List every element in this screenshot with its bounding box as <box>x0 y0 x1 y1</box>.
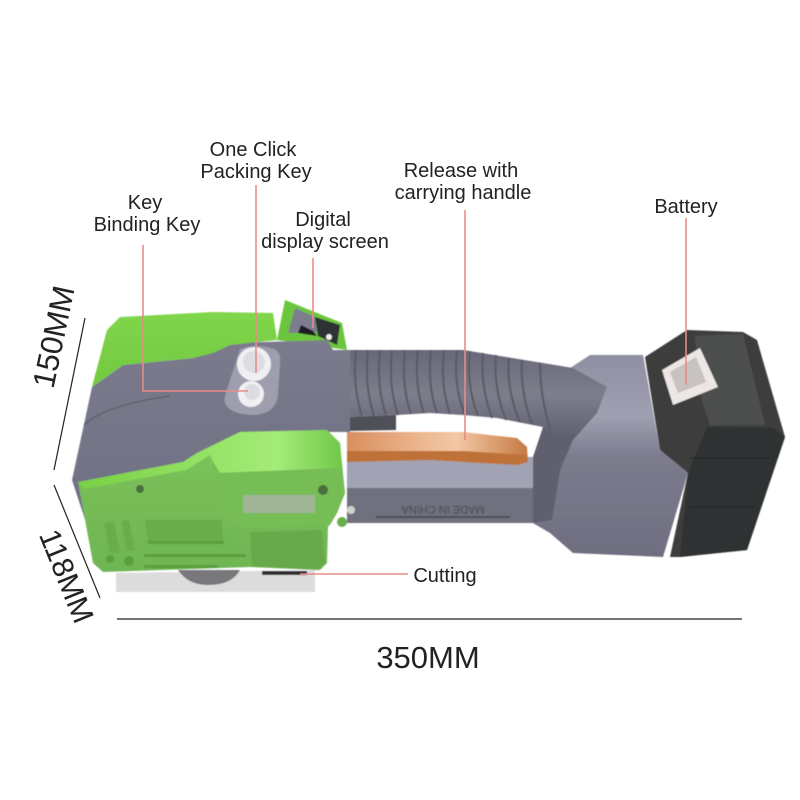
base plate <box>116 570 315 592</box>
cutter <box>262 571 307 575</box>
grey housing <box>72 340 350 565</box>
lower rail: MADE IN CHINA <box>401 503 485 515</box>
label: battery: Battery <box>654 196 718 218</box>
rating plate <box>243 495 315 513</box>
key panel <box>225 346 280 415</box>
vents <box>104 520 246 568</box>
label: one click packing key: Packing Key <box>200 161 312 183</box>
callout lines <box>143 185 686 574</box>
label: one click packing key: One Click <box>210 139 297 161</box>
dimension: 150MM <box>26 283 85 470</box>
screws <box>136 485 144 493</box>
label: release with carrying handle: carrying handle <box>395 182 531 204</box>
top green cover <box>92 312 277 387</box>
label: key binding key: Binding Key <box>94 214 200 236</box>
rear connector shadow <box>533 427 573 523</box>
dimension: 150MM: 150MM <box>26 283 82 391</box>
rear grip body <box>533 355 688 557</box>
trigger mount <box>347 415 396 431</box>
battery latch button <box>662 348 718 405</box>
label: key binding key: Key <box>128 192 162 214</box>
dimension: 118MM: 118MM <box>32 525 99 628</box>
strapping tool illustration <box>72 300 785 592</box>
copper release handle <box>347 432 528 465</box>
label: cutting: Cutting <box>413 565 477 587</box>
dimension: 350MM: 350MM <box>376 640 480 675</box>
battery <box>645 330 785 557</box>
digital display housing <box>277 300 347 350</box>
label: release with carrying handle: Release with <box>404 160 518 182</box>
front green cover <box>78 430 355 572</box>
corrugated handle <box>347 350 607 440</box>
label: digital display screen: Digital <box>295 209 351 231</box>
label: digital display screen: display screen <box>261 231 389 253</box>
lower rail <box>347 457 536 523</box>
drive wheel <box>178 570 240 585</box>
